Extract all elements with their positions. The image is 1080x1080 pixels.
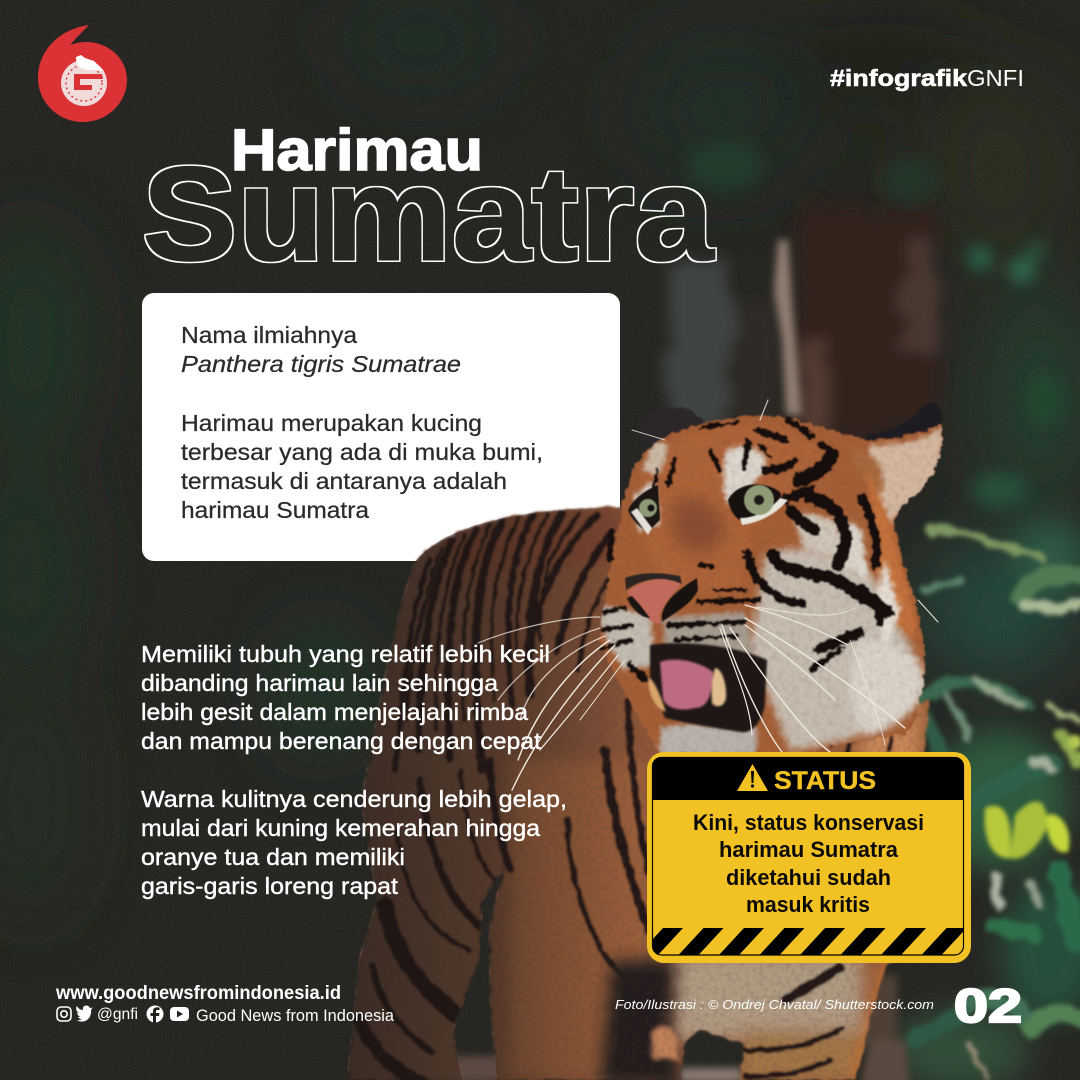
text block: body description: Memiliki tubuh yang relatif lebih kecil <box>141 641 550 667</box>
tiger body <box>340 500 940 1080</box>
panel: white intro card: harimau Sumatra <box>181 497 369 523</box>
tiger head <box>600 400 943 760</box>
footer: website and social media: Good News from Indonesia <box>196 1006 395 1025</box>
foliage: lower right <box>890 520 1080 1080</box>
title: Harimau Sumatra: Harimau <box>231 118 483 183</box>
panel: status warning sign: Kini, status konservasi <box>693 810 924 835</box>
tree trunks <box>668 205 940 435</box>
right eye <box>728 484 788 525</box>
left eye <box>628 485 660 535</box>
mouth <box>648 643 767 732</box>
hashtag: GNFI <box>967 65 1024 91</box>
head fur and stripes <box>600 400 943 760</box>
pale streak on trunk <box>774 240 802 415</box>
title: Harimau Sumatra: Sumatra <box>142 140 716 289</box>
text block: skin colour: Warna kulitnya cenderung lebih gelap, <box>141 786 567 812</box>
footer: website and social media: www.goodnewsfromindonesia.id <box>55 983 341 1004</box>
panel: white intro card: terbesar yang ada di muka bumi, <box>181 439 543 465</box>
panel: white intro card: Nama ilmiahnya <box>181 322 357 348</box>
text block: skin colour: garis-garis loreng rapat <box>141 873 399 899</box>
panel: white intro card: Harimau merupakan kucing <box>181 410 482 436</box>
footer: website and social media: @gnfi <box>97 1006 138 1023</box>
text block: body description: lebih gesit dalam menjelajahi rimba <box>141 699 528 725</box>
icon: youtube <box>170 1007 189 1021</box>
text block: skin colour <box>141 786 567 899</box>
panel: status warning sign <box>638 752 971 963</box>
text block: skin colour: oranye tua dan memiliki <box>141 844 405 870</box>
hazard stripes <box>638 928 966 955</box>
whiskers <box>478 400 938 790</box>
text block: body description: dibanding harimau lain sehingga <box>141 670 498 696</box>
panel: white intro card: termasuk di antaranya adalah <box>181 468 507 494</box>
panel: status warning sign: diketahui sudah <box>726 865 891 890</box>
icon: warning triangle <box>737 764 768 791</box>
panel: status warning sign: masuk kritis <box>746 892 870 917</box>
icon: facebook <box>146 1006 164 1023</box>
nose <box>625 573 698 624</box>
footer: website and social media <box>55 983 395 1025</box>
panel: white intro card: Panthera tigris Sumatrae <box>181 351 461 377</box>
logo: GNFI red speech bubble <box>38 25 127 122</box>
photo credit: Foto/Ilustrasi : © Ondrej Chvatal/ Shutterstock.com <box>615 997 934 1012</box>
text block: skin colour: mulai dari kuning kemerahan hingga <box>141 815 540 841</box>
panel: white intro card <box>142 293 620 561</box>
text block: body description: dan mampu berenang dengan cepat <box>141 728 542 754</box>
text block: body description <box>141 641 550 754</box>
ground <box>445 975 910 1080</box>
foliage: upper right <box>687 139 1063 508</box>
icon: instagram <box>57 1007 71 1021</box>
page number: 02 <box>954 979 1022 1032</box>
icon: twitter <box>76 1006 93 1022</box>
panel: status warning sign: STATUS <box>774 767 876 795</box>
hashtag: #infografik <box>830 65 967 91</box>
hashtag <box>830 65 1024 91</box>
panel: status warning sign: harimau Sumatra <box>719 837 899 862</box>
